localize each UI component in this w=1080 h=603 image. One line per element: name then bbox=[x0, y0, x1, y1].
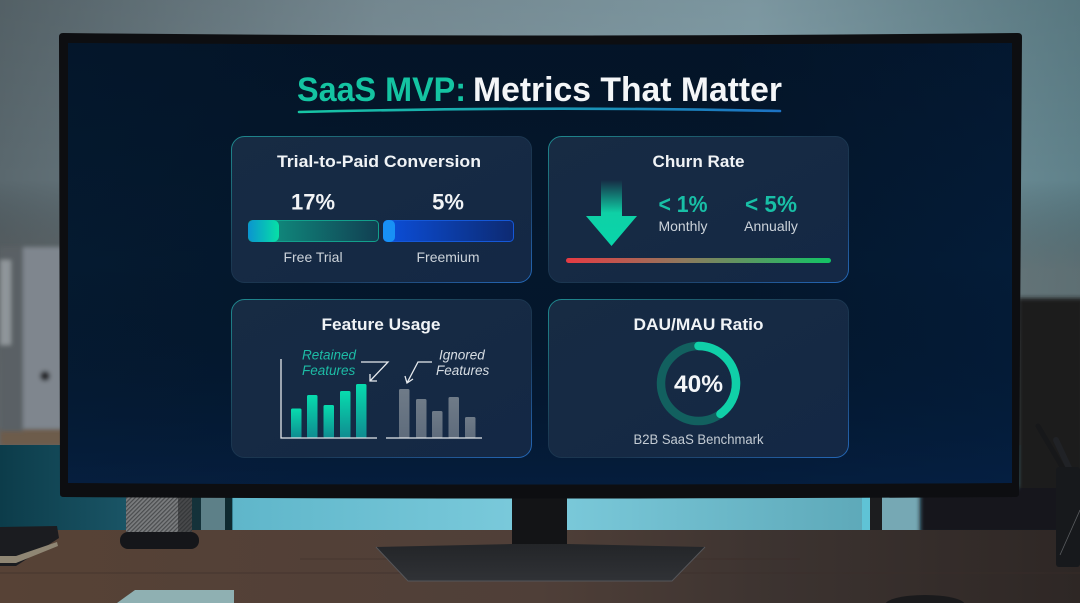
title bbox=[297, 71, 782, 109]
panel: churn rate bbox=[548, 136, 848, 282]
label: monthly: Monthly bbox=[658, 218, 708, 234]
monitor stand bbox=[376, 494, 705, 581]
blurred office background bbox=[0, 0, 1080, 450]
icon: down arrow bbox=[586, 180, 637, 246]
heading: feature usage: Feature Usage bbox=[322, 315, 440, 334]
notebook bbox=[0, 526, 59, 566]
heading: trial-to-paid conversion: Trial-to-Paid Conversion bbox=[277, 152, 481, 171]
monitor bezel bbox=[59, 33, 1022, 498]
blurred office binders bbox=[0, 247, 63, 431]
value: 5%: 5% bbox=[432, 190, 464, 214]
light box on desk bbox=[117, 590, 234, 603]
heading: dau/mau ratio: DAU/MAU Ratio bbox=[634, 315, 764, 334]
chart: retained features bars bbox=[281, 359, 377, 438]
pen holder with pens bbox=[1038, 426, 1080, 567]
title: Metrics That Matter bbox=[473, 71, 782, 109]
wooden desk bbox=[0, 530, 1080, 603]
arrow: ignored callout bbox=[405, 362, 432, 383]
computer mouse bbox=[885, 595, 965, 603]
value: under 5%: < 5% bbox=[745, 191, 797, 217]
title: SaaS MVP: bbox=[297, 71, 466, 109]
teal wall below monitor bbox=[0, 445, 1080, 532]
label: retained features: Retained bbox=[302, 348, 357, 362]
value: under 1%: < 1% bbox=[658, 191, 708, 217]
heading: churn rate: Churn Rate bbox=[652, 152, 744, 171]
label: b2b saas benchmark: B2B SaaS Benchmark bbox=[634, 432, 764, 447]
mesh cylinder speaker bbox=[120, 495, 199, 549]
bar: freemium bbox=[383, 220, 514, 242]
red to green scale bar bbox=[566, 258, 831, 263]
label: annually: Annually bbox=[744, 218, 798, 234]
label: freemium: Freemium bbox=[416, 249, 480, 265]
panel: dau/mau ratio bbox=[548, 300, 848, 458]
donut chart: 40%: 40% bbox=[674, 371, 723, 398]
chart: ignored features bars bbox=[386, 389, 482, 438]
dark chair at right bbox=[920, 298, 1080, 534]
label: ignored features: Features bbox=[436, 363, 490, 378]
label: ignored features: Ignored bbox=[439, 348, 485, 362]
label: free trial: Free Trial bbox=[283, 249, 343, 265]
label: retained features: Features bbox=[302, 363, 356, 378]
value: 17%: 17% bbox=[291, 190, 335, 214]
monitor screen bbox=[68, 43, 1012, 484]
panel: trial-to-paid conversion bbox=[232, 136, 532, 282]
arrow: retained callout bbox=[361, 362, 388, 381]
panel: feature usage bbox=[232, 300, 532, 458]
donut chart: 40% bbox=[661, 346, 736, 421]
bar: free trial bbox=[248, 220, 378, 242]
title underline bbox=[299, 109, 780, 112]
